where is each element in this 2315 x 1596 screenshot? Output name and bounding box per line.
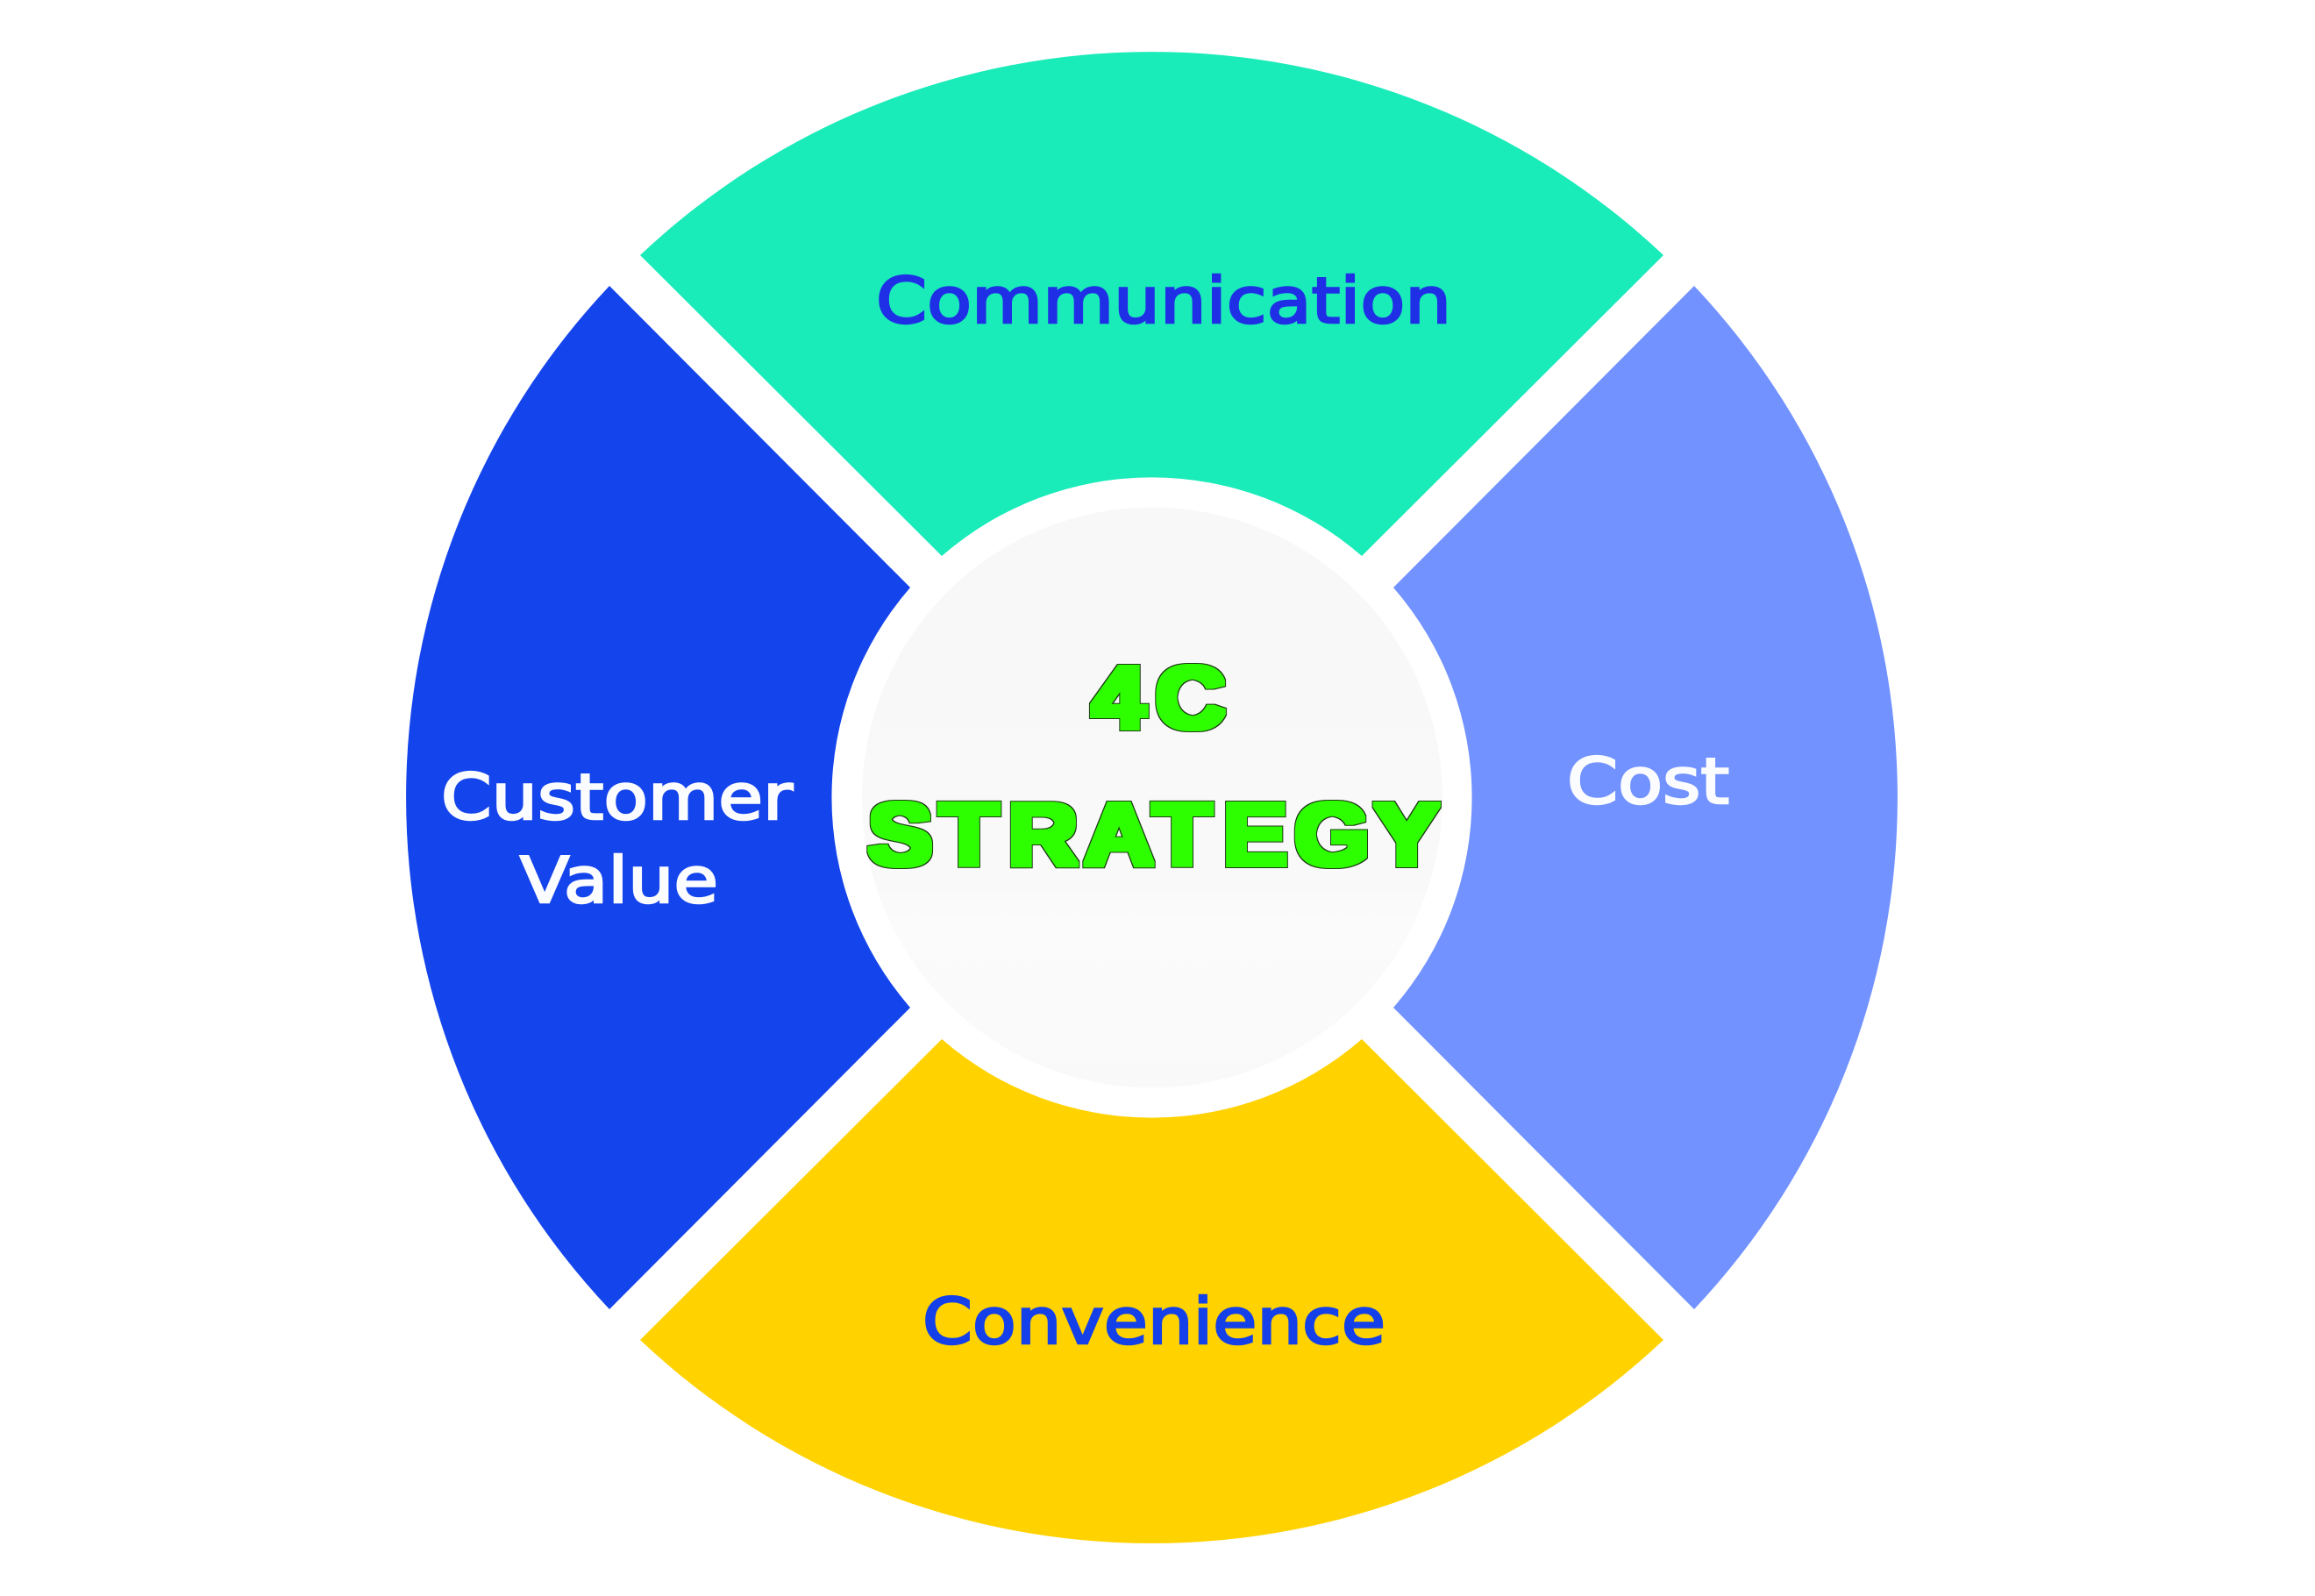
- segment: Cost: [1393, 286, 1898, 1309]
- label: Cost: Cost: [1567, 745, 1729, 818]
- center circle: [862, 507, 1442, 1087]
- label: Convenience: Convenience: [922, 1285, 1385, 1358]
- segment: Communication: [640, 52, 1663, 556]
- title: 4C STRATEGY: 4C: [1092, 650, 1225, 747]
- label: Customer Value: Customer: [441, 760, 793, 834]
- title: 4C STRATEGY: STRATEGY: [868, 787, 1439, 884]
- segment: Customer Value: [406, 286, 910, 1309]
- label: Customer Value: Value: [520, 844, 718, 917]
- label: Communication: Communication: [876, 264, 1451, 338]
- title: 4C STRATEGY: [868, 650, 1439, 884]
- segment: Convenience: [640, 1039, 1663, 1543]
- label: Customer Value: [441, 760, 793, 917]
